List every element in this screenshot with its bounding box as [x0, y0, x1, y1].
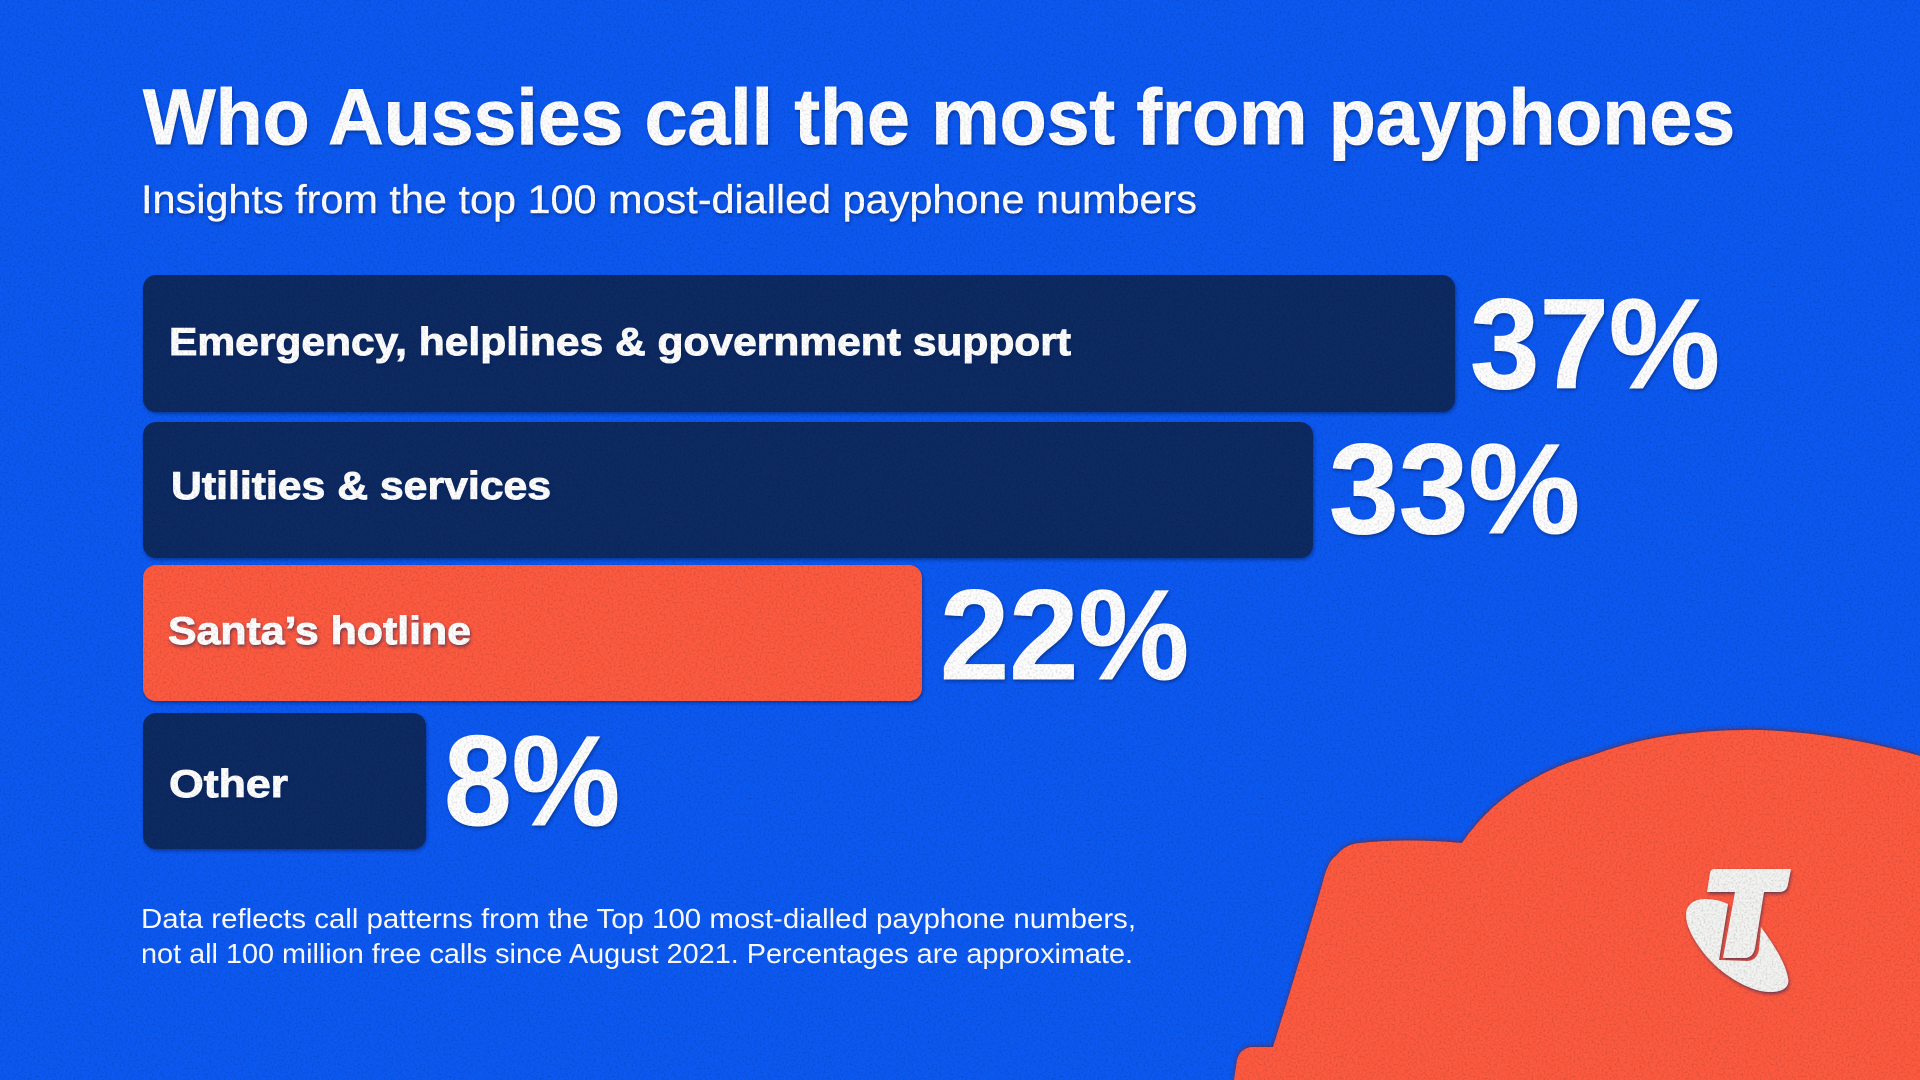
footnote: [141, 903, 1136, 969]
title: Who Aussies call the most from payphones: [143, 72, 1735, 161]
value: 37%: 37%: [1470, 273, 1720, 416]
label: utilities: Utilities & services: [171, 465, 551, 508]
subtitle: Insights from the top 100 most-dialled payphone numbers: [141, 178, 1197, 222]
logo swoosh: [1686, 899, 1788, 992]
label: santa: Santa’s hotline: [168, 610, 471, 653]
bar: other 8%: [143, 713, 426, 849]
logo: Telstra-style T: [1686, 869, 1791, 992]
footnote: not all 100 million free calls since August 2021. Percentages are approximate.: [141, 938, 1133, 969]
bar: santa 22%: [143, 565, 922, 701]
bar: emergency 37%: [143, 275, 1455, 412]
value: 22%: 22%: [940, 564, 1189, 707]
bar: utilities 33%: [143, 422, 1313, 558]
logo T: [1707, 869, 1791, 958]
footnote: Data reflects call patterns from the Top 100 most-dialled payphone numbers,: [141, 903, 1136, 934]
value: 8%: 8%: [444, 710, 620, 853]
label: other: Other: [169, 763, 288, 806]
label: emergency: Emergency, helplines & government support: [169, 321, 1071, 364]
value: 33%: 33%: [1329, 418, 1580, 561]
coral payphone shape: [1234, 730, 1920, 1080]
